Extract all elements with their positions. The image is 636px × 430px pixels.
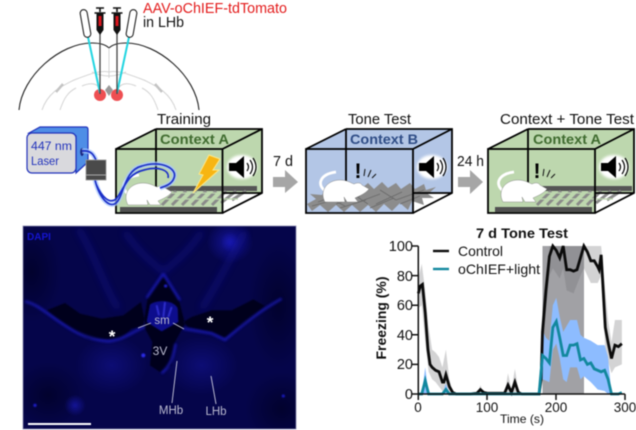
label: virus bbox=[143, 1, 287, 31]
y tick labels bbox=[389, 239, 413, 403]
y tick labels: 100 bbox=[389, 239, 413, 255]
icon: speaker bbox=[227, 155, 257, 179]
tone period band bbox=[542, 246, 584, 394]
anatomical labels and leaders bbox=[138, 315, 227, 418]
anatomical labels and leaders: LHb bbox=[205, 406, 227, 418]
heading: Context A: Context A bbox=[160, 131, 229, 147]
icon: rat bbox=[124, 175, 172, 205]
x tick labels: 100 bbox=[476, 400, 498, 415]
icon: alarm mark bbox=[354, 160, 376, 183]
fiber connector bbox=[86, 160, 106, 180]
heading: Context B: Context B bbox=[350, 131, 418, 147]
chart: freezing over time in 7 d tone test bbox=[373, 226, 636, 426]
anatomical labels and leaders: MHb bbox=[159, 405, 183, 417]
icon: speaker bbox=[599, 155, 629, 179]
diagram: bilateral fiber and virus targeting in brain section bbox=[19, 8, 199, 110]
label and arrow: 7 d bbox=[273, 154, 298, 193]
y tick labels: 0 bbox=[405, 387, 413, 403]
chamber edges bbox=[116, 129, 262, 213]
asterisks: * bbox=[109, 327, 116, 346]
label: DAPI: DAPI bbox=[27, 232, 51, 243]
label: virus: AAV-oChIEF-tdTomato bbox=[143, 1, 287, 17]
icon: shock bolt bbox=[193, 155, 220, 193]
chart title: 7 d Tone Test bbox=[476, 226, 569, 241]
label: virus: in LHb bbox=[143, 15, 184, 31]
data series bbox=[418, 246, 622, 394]
heading: Tone Test: Tone Test bbox=[348, 112, 411, 128]
heading: Context + Tone Test: Context + Tone Test bbox=[500, 112, 634, 128]
anatomical labels and leaders: 3V bbox=[153, 344, 167, 358]
icon: 447 nm laser bbox=[27, 127, 88, 173]
label and arrow: 7 d: 7 d bbox=[273, 154, 293, 170]
optic cable bbox=[82, 151, 175, 204]
icon: rat bbox=[499, 172, 547, 202]
x tick labels: 200 bbox=[545, 400, 567, 415]
y axis title: Freezing (%) bbox=[373, 276, 389, 360]
panel: DAPI micrograph bbox=[22, 225, 297, 430]
chamber edges bbox=[488, 129, 634, 213]
icon: alarm mark: ! bbox=[354, 160, 362, 183]
x axis title: Time (s) bbox=[500, 412, 544, 426]
chamber edges bbox=[306, 129, 452, 213]
icon: 447 nm laser: Laser bbox=[31, 154, 59, 168]
panel: context + tone test chamber bbox=[488, 129, 634, 213]
icon: alarm mark bbox=[534, 160, 555, 183]
heading: Context A: Context A bbox=[533, 131, 601, 147]
asterisks bbox=[109, 313, 214, 346]
axes bbox=[412, 246, 625, 400]
panel: tone test chamber bbox=[306, 129, 452, 213]
y tick labels: 80 bbox=[397, 269, 413, 285]
x tick labels: 300 bbox=[614, 400, 636, 415]
scale bar bbox=[28, 423, 91, 425]
legend: oChIEF+light bbox=[458, 261, 540, 277]
grid floor bbox=[495, 186, 632, 212]
panel: training chamber bbox=[82, 129, 262, 213]
syringes bbox=[94, 8, 122, 94]
legend: Control bbox=[458, 243, 503, 259]
icon: speaker bbox=[417, 155, 447, 179]
grid floor bbox=[120, 186, 257, 212]
icon: 447 nm laser: 447 nm bbox=[31, 139, 72, 153]
label and arrow: 24 h: 24 h bbox=[457, 154, 484, 170]
asterisks: * bbox=[207, 313, 214, 332]
anatomical labels and leaders: sm bbox=[154, 315, 170, 327]
dark ventricle bands bbox=[47, 276, 265, 372]
brain outline bbox=[19, 43, 199, 110]
bedding bbox=[307, 182, 436, 212]
y tick labels: 20 bbox=[397, 357, 413, 373]
x tick labels bbox=[414, 400, 636, 415]
icon: alarm mark: ! bbox=[534, 160, 540, 183]
legend bbox=[433, 243, 540, 277]
heading: Training: Training bbox=[157, 112, 211, 128]
icon: rat bbox=[321, 172, 369, 202]
y tick labels: 60 bbox=[397, 298, 413, 314]
injection sites bbox=[94, 89, 123, 101]
label and arrow: 24 h bbox=[457, 154, 484, 194]
y tick labels: 40 bbox=[397, 328, 413, 344]
optical fibers bbox=[80, 9, 137, 93]
x tick labels: 0 bbox=[414, 400, 422, 415]
